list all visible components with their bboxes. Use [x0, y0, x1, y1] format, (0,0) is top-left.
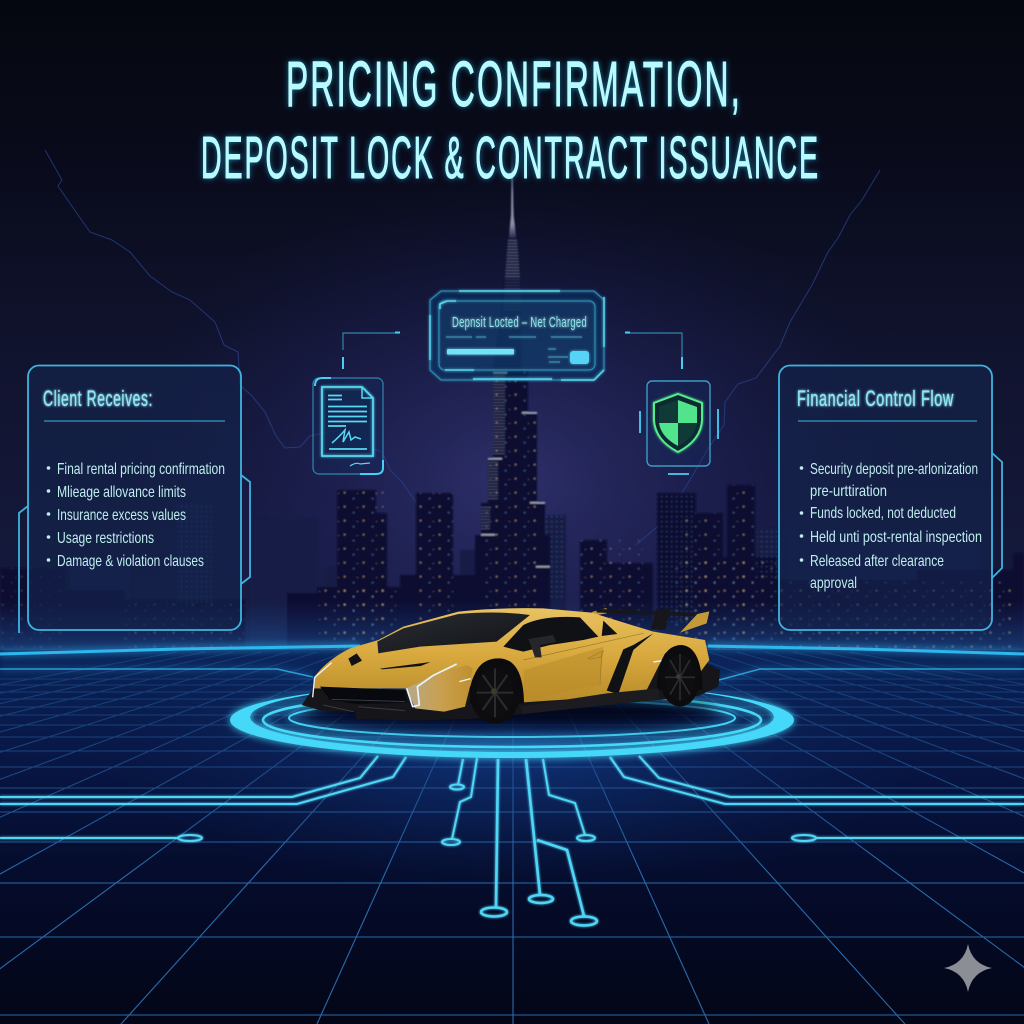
- icon: sparkle watermark: [944, 944, 992, 992]
- lower door shading: [523, 647, 603, 702]
- glowing platform rings: [230, 682, 794, 758]
- front buildings: [0, 485, 1024, 650]
- icon: contract document: [313, 378, 383, 474]
- bullet list: Insurance excess values: [57, 507, 186, 524]
- gold body: [313, 608, 709, 712]
- heading: Client Receives:: [43, 386, 153, 411]
- Burj tower: [475, 148, 550, 650]
- wheel arches: [470, 645, 703, 703]
- front wheel: [470, 662, 520, 724]
- bullet list: approval: [810, 575, 857, 592]
- back buildings: [70, 503, 980, 650]
- bullet list: Damage & violation clauses: [57, 553, 204, 570]
- bullet list: [800, 461, 982, 592]
- city skyline: [0, 485, 1024, 650]
- small print: [446, 337, 582, 362]
- windshield: [377, 613, 530, 653]
- horizon light bars: [0, 646, 1024, 680]
- progress bar: [447, 349, 514, 354]
- yellow supercar: [302, 608, 720, 724]
- rear wing: [592, 608, 709, 633]
- body lines: [523, 633, 643, 685]
- action button: [570, 351, 589, 364]
- hood vents: [348, 653, 431, 669]
- card: deposit status: [430, 291, 604, 380]
- bullet list: Usage restrictions: [57, 530, 154, 547]
- title: [201, 48, 820, 191]
- night sky background: [0, 0, 1024, 660]
- horizon haze: [0, 600, 1024, 652]
- panel: financial control flow: [779, 366, 1002, 630]
- side windows: [503, 617, 598, 652]
- side intake: [607, 633, 653, 694]
- front fascia: [407, 665, 473, 712]
- status text: Depnsit Locted – Net Charged: [452, 315, 587, 331]
- lit windows: [0, 485, 1013, 650]
- rear wheel: [660, 648, 700, 707]
- bullet list: pre-urttiration: [810, 483, 887, 500]
- side sill: [520, 688, 660, 714]
- connector lines: [343, 332, 682, 369]
- bullet list: Held unti post-rental inspection: [810, 529, 982, 546]
- bullet list: Released after clearance: [810, 553, 944, 570]
- icon: security shield: [640, 381, 718, 474]
- car shadow: [307, 696, 717, 728]
- bullet list: Mlieage allovance limits: [57, 484, 186, 501]
- bullet list: Final rental pricing confirmation: [57, 461, 225, 478]
- underbody: [302, 662, 720, 721]
- floor with perspective grid: [0, 650, 1024, 1024]
- bullet list: [47, 461, 225, 570]
- circuit traces: [0, 756, 1024, 926]
- LED headlights: [313, 661, 661, 707]
- mirror: [528, 635, 556, 657]
- lightning bolts: [45, 150, 880, 545]
- panel: client receives: [19, 366, 250, 633]
- bullet list: Funds locked, not deducted: [810, 505, 956, 522]
- grille: [320, 687, 407, 704]
